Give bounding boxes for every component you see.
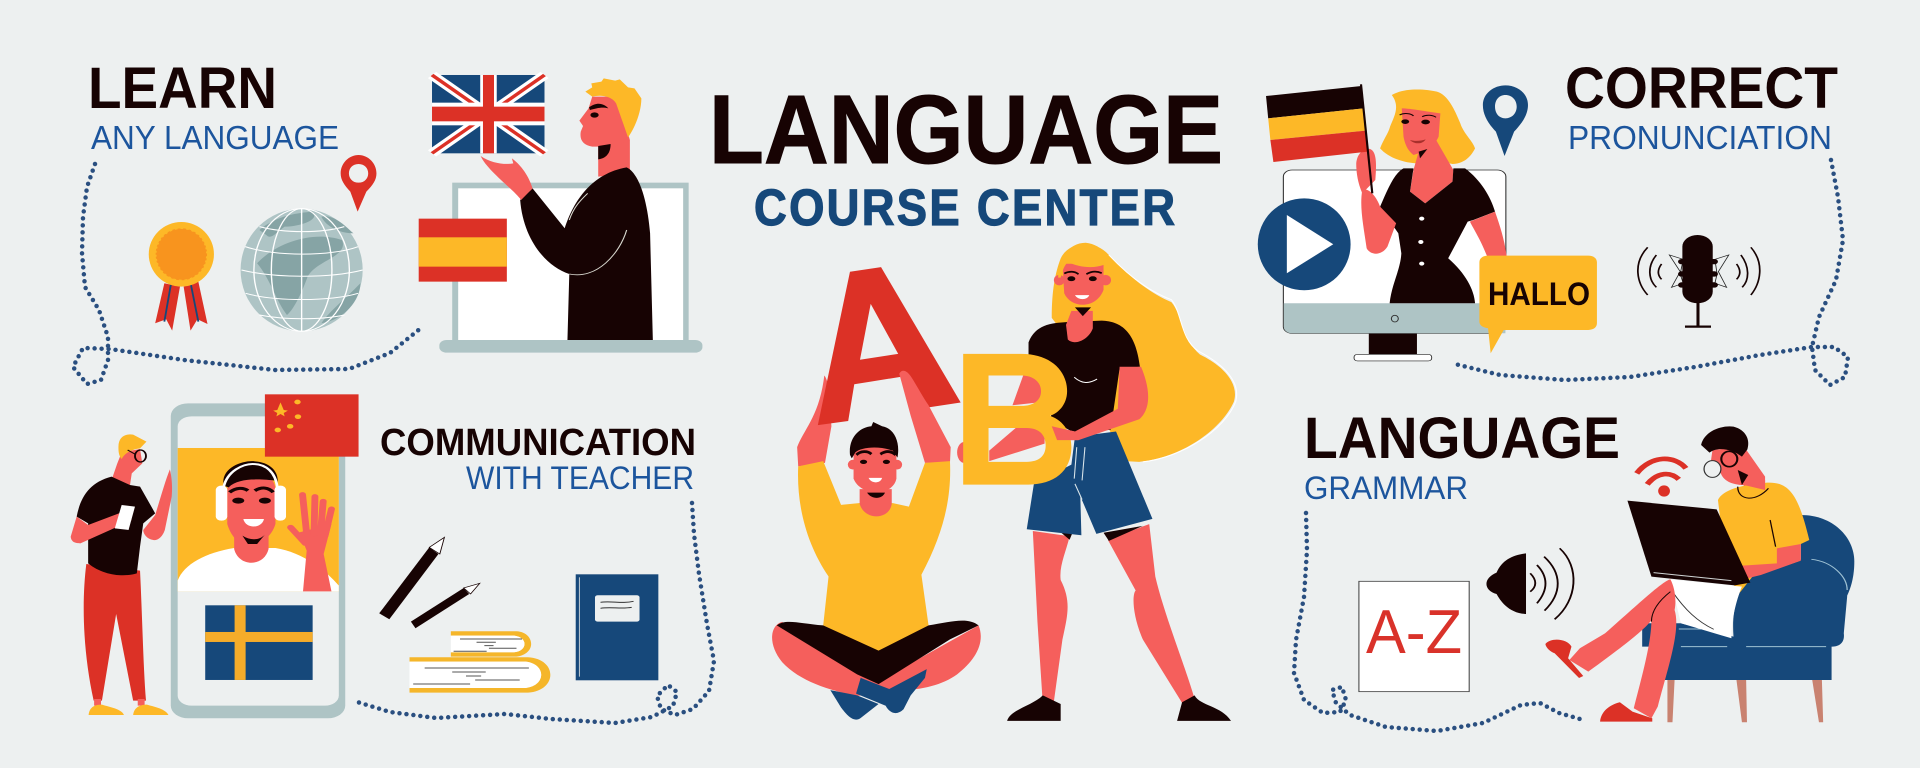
icon: book stack xyxy=(410,631,550,693)
teacher with blonde hair xyxy=(481,78,653,340)
panel: central figures xyxy=(772,243,1237,721)
icon: pencils xyxy=(379,537,480,628)
icon: notebook xyxy=(576,574,658,680)
armchair xyxy=(1642,515,1854,722)
dotted connector: learn xyxy=(73,164,421,384)
subtitle: course center: COURSE CENTER xyxy=(754,180,1175,237)
dotted connector: pronunciation xyxy=(1455,160,1848,385)
icon: German flag xyxy=(1266,84,1372,193)
icon: speaker xyxy=(1486,548,1574,619)
reading student with laptop xyxy=(1545,426,1809,722)
icon: Spanish flag xyxy=(419,219,507,282)
title line: language: LANGUAGE xyxy=(709,75,1223,184)
laptop screen xyxy=(439,183,702,353)
icon: microphone xyxy=(1638,235,1760,327)
heading: communication with teacher: COMMUNICATION xyxy=(380,422,696,464)
monitor xyxy=(1283,170,1506,361)
heading: language grammar xyxy=(1304,406,1620,506)
panel: learn illustrations xyxy=(149,75,702,353)
icon: Chinese flag xyxy=(265,394,359,457)
heading: correct pronunciation xyxy=(1565,56,1838,156)
panel: pronunciation illustrations xyxy=(1258,84,1760,361)
waving hand xyxy=(291,495,331,591)
icon: UK flag xyxy=(432,75,544,153)
icon: wifi xyxy=(1637,459,1686,497)
label: hallo: HALLO xyxy=(1488,276,1590,312)
student with phone xyxy=(71,434,172,715)
icon: globe xyxy=(241,209,363,331)
heading: language grammar: GRAMMAR xyxy=(1304,470,1468,506)
heading: communication with teacher xyxy=(380,422,696,496)
heading: communication with teacher: WITH TEACHER xyxy=(466,460,694,496)
letter A xyxy=(818,267,961,425)
icon: blue map pin xyxy=(1483,85,1528,156)
woman holding letter B xyxy=(957,243,1237,721)
icon: Swedish flag xyxy=(205,605,313,680)
icon: medal xyxy=(149,222,214,331)
heading: language grammar: LANGUAGE xyxy=(1304,406,1620,471)
dotted connector: communication xyxy=(354,503,714,723)
seated man holding letter A xyxy=(772,267,981,720)
panel: communication illustrations xyxy=(71,394,658,718)
dotted connector: grammar xyxy=(1294,513,1580,731)
heading: correct pronunciation: CORRECT xyxy=(1565,56,1838,121)
smartphone with video call xyxy=(171,403,345,718)
label: A-Z: A-Z xyxy=(1366,598,1462,667)
heading: learn any language: ANY LANGUAGE xyxy=(91,119,339,156)
woman teacher with flag xyxy=(1266,84,1507,303)
panel: grammar illustrations xyxy=(1359,426,1854,722)
heading: learn any language xyxy=(88,56,339,156)
letter B xyxy=(963,354,1071,485)
speech bubble: hallo xyxy=(1479,256,1597,353)
icon: play button xyxy=(1258,198,1351,290)
A-Z card xyxy=(1359,581,1469,692)
heading: learn any language: LEARN xyxy=(88,56,277,121)
title xyxy=(709,75,1223,237)
icon: red map pin xyxy=(341,155,376,212)
heading: correct pronunciation: PRONUNCIATION xyxy=(1568,119,1832,156)
